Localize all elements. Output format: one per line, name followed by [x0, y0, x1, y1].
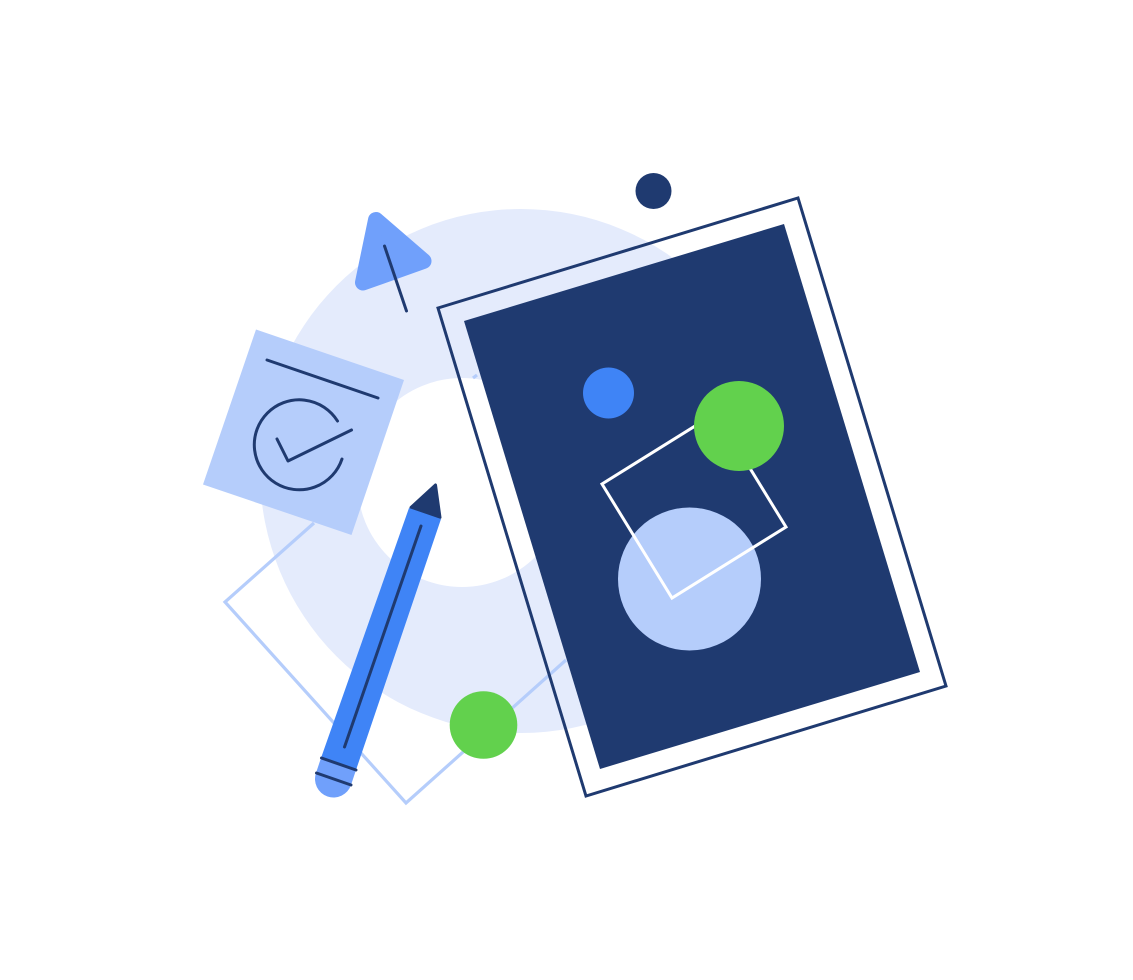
check circle [254, 400, 342, 490]
pencil [315, 485, 441, 798]
picture frame [438, 198, 946, 796]
pencil body [321, 508, 441, 770]
frame outline [438, 198, 946, 796]
canvas: green circle [694, 381, 784, 471]
pencil eraser [315, 758, 356, 798]
navy dot [636, 173, 672, 209]
pin triangle icon [363, 220, 424, 311]
canvas: white outlined square [602, 413, 786, 598]
sticky note with check mark [203, 330, 404, 535]
pencil band top [322, 758, 356, 770]
pencil centre line [344, 526, 421, 747]
canvas: blue circle [583, 368, 634, 418]
navy canvas [464, 224, 920, 769]
check mark [277, 430, 352, 461]
note paper [203, 330, 404, 535]
note line [267, 360, 378, 398]
canvas: pale blue circle [618, 508, 761, 650]
background ring [260, 209, 782, 733]
outlined light-blue square [225, 375, 566, 803]
pencil tip [411, 485, 440, 518]
triangle [363, 220, 424, 282]
stem [384, 246, 406, 311]
pencil band bottom [316, 773, 351, 785]
green circle [450, 691, 517, 759]
